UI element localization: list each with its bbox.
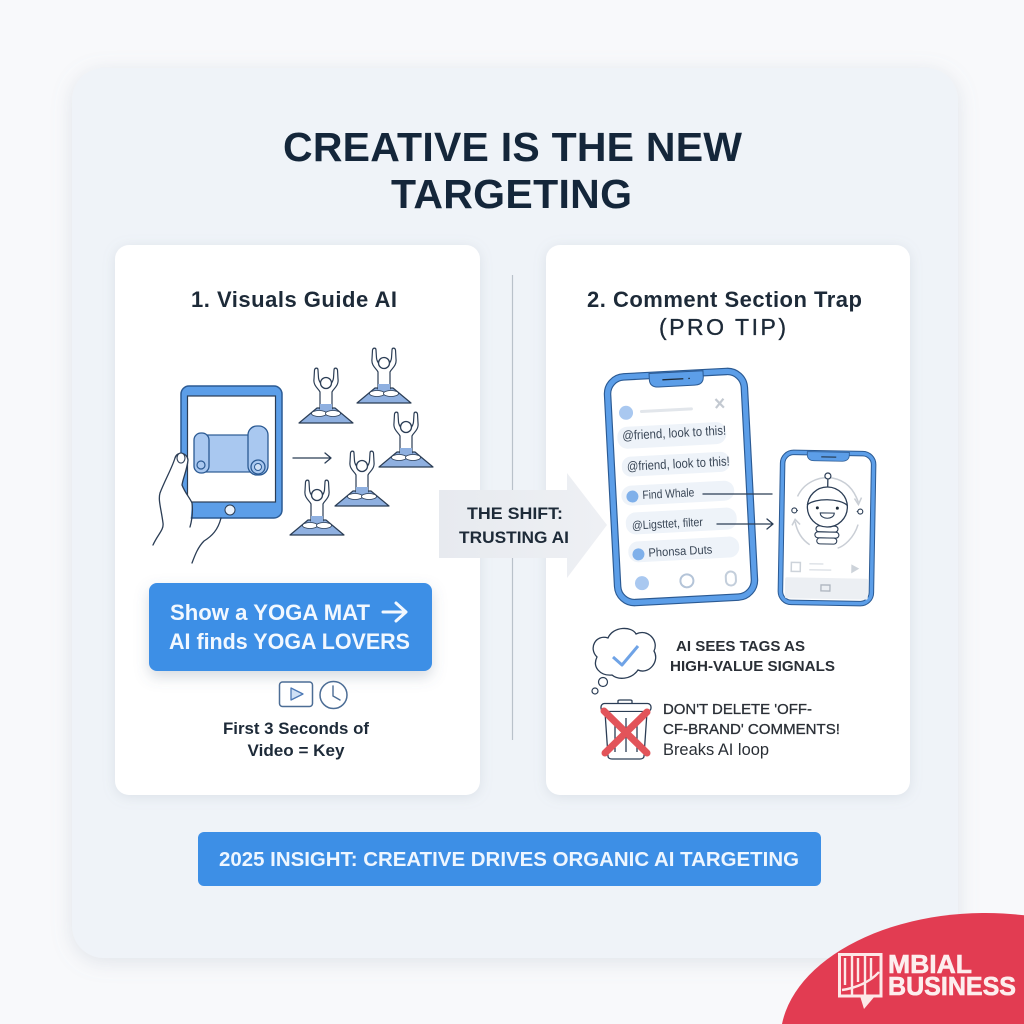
- text: do not delete comments: [663, 701, 840, 759]
- callout: yoga mat finds yoga lovers: [149, 583, 432, 671]
- icon: hand holding tablet: [153, 453, 221, 563]
- title: TARGETING: [391, 171, 632, 217]
- panel: comment section trap: [546, 245, 910, 795]
- callout: yoga mat finds yoga lovers: Show a YOGA MAT: [170, 600, 371, 625]
- title: [283, 124, 742, 217]
- phone: comment feed: @Ligsttet, filter: [632, 515, 703, 533]
- text: do not delete comments: CF-BRAND' COMMENTS!: [663, 721, 840, 738]
- logo badge: [782, 913, 1024, 1024]
- main panel: [72, 68, 958, 958]
- icon: video play: [280, 682, 312, 706]
- banner: 2025 insight: 2025 INSIGHT: CREATIVE DRIVES ORGANIC AI TARGETING: [219, 848, 799, 871]
- text: AI sees tags: HIGH-VALUE SIGNALS: [670, 658, 835, 675]
- heading: visuals guide AI: 1. Visuals Guide AI: [191, 287, 397, 312]
- arrow: the shift: TRUSTING AI: [459, 529, 569, 547]
- title: CREATIVE IS THE NEW: [283, 124, 742, 170]
- icon: crossed-out trash can: [601, 700, 651, 759]
- phone: comment feed: [607, 369, 755, 603]
- text: AI sees tags: [670, 638, 835, 675]
- phone: comment feed: Find Whale: [642, 485, 695, 502]
- phone: comment feed: @friend, look to this!: [626, 453, 730, 474]
- text: AI sees tags: AI SEES TAGS AS: [676, 638, 805, 655]
- icon: clock: [320, 682, 347, 708]
- icon: tablet showing yoga mat: [181, 386, 282, 518]
- text: do not delete comments: Breaks AI loop: [663, 741, 769, 759]
- divider line: [512, 275, 514, 740]
- text: do not delete comments: DON'T DELETE 'OFF-: [663, 701, 812, 718]
- icon: robot: [791, 472, 863, 545]
- logo wordmark: MBIAL: [888, 949, 972, 979]
- callout: yoga mat finds yoga lovers: AI finds YOGA LOVERS: [169, 629, 410, 654]
- arrow: the shift: [439, 473, 607, 578]
- logo wordmark: BUSINESS: [888, 971, 1016, 1001]
- arrow: mat to audience: [293, 453, 331, 463]
- icon: yoga audience: [290, 348, 433, 535]
- text: first 3 seconds: Video = Key: [248, 742, 345, 760]
- phone: comment feed: Phonsa Duts: [648, 542, 713, 560]
- text: first 3 seconds: [223, 720, 370, 760]
- phone: comment feed: @friend, look to this!: [622, 423, 726, 443]
- phone: AI robot: [780, 451, 874, 604]
- text: first 3 seconds: First 3 Seconds of: [223, 720, 370, 738]
- icon: circular arrows: [792, 477, 862, 549]
- icon: chart logo: [840, 954, 881, 1009]
- heading: comment section trap: [587, 287, 862, 340]
- panel: visuals guide AI: [115, 245, 480, 795]
- heading: comment section trap: (PRO TIP): [659, 314, 786, 340]
- heading: comment section trap: 2. Comment Section Trap: [587, 287, 862, 312]
- arrow: the shift: THE SHIFT:: [467, 505, 563, 523]
- logo wordmark: [888, 949, 1016, 1001]
- banner: 2025 insight: [198, 832, 821, 886]
- arrows: comments to AI: [703, 494, 773, 529]
- icon: thought bubble with check: [592, 628, 656, 694]
